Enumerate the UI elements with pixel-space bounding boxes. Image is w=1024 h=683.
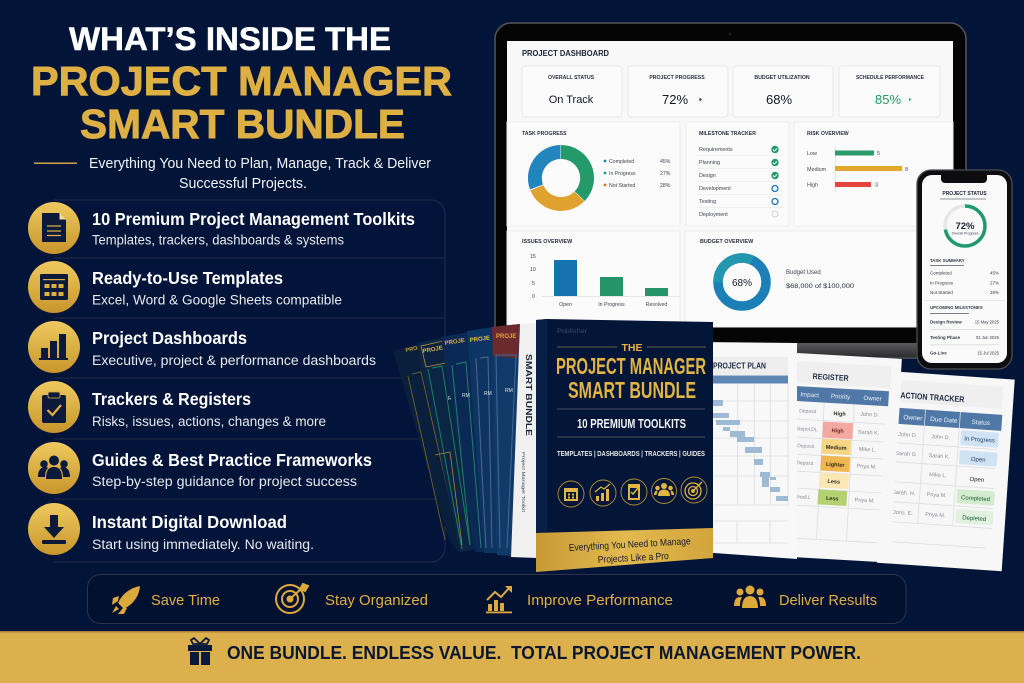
gantt chart xyxy=(713,384,788,543)
task summary: In Progress xyxy=(930,280,954,286)
sheet: register: Deposit xyxy=(797,443,815,450)
benefit: save time xyxy=(112,586,220,614)
panel: risk overview: 3 xyxy=(875,182,878,188)
book subtitle: 10 PREMIUM TOOLKITS xyxy=(577,417,686,431)
feature: download: Instant Digital Download xyxy=(92,512,287,532)
register heading: REGISTER xyxy=(812,372,849,383)
upcoming milestones: UPCOMING MILESTONES xyxy=(930,305,983,310)
panel: risk overview xyxy=(794,122,953,226)
panel: task progress xyxy=(507,122,680,226)
status pills: Open xyxy=(971,457,986,464)
feature: download xyxy=(28,503,314,555)
icon: people xyxy=(734,586,766,608)
feature: dashboards: Executive, project & performance dashboards xyxy=(92,353,376,368)
status pills: Completed xyxy=(961,495,990,503)
benefit: deliver results: Deliver Results xyxy=(779,593,877,609)
sheet: action tracker xyxy=(877,371,1015,571)
sheet: register: Priya M. xyxy=(854,498,875,505)
subtitle xyxy=(34,156,431,192)
KPI: overall status xyxy=(522,66,622,117)
title xyxy=(31,21,452,147)
panel: milestone tracker: Testing xyxy=(699,199,716,205)
icon: document xyxy=(42,213,66,242)
sheet: register: Impact xyxy=(800,391,819,399)
sheet: project plan xyxy=(700,342,797,559)
upcoming milestones xyxy=(924,300,1005,356)
panel: issues overview: 10 xyxy=(530,267,536,273)
panel: milestone tracker: Deployment xyxy=(699,212,728,218)
priority cells xyxy=(817,411,854,506)
progress ring: 72% xyxy=(955,221,975,232)
book categories: TEMPLATES | DASHBOARDS | TRACKERS | GUIDES xyxy=(557,449,705,458)
sheet: register xyxy=(785,353,902,563)
KPI: overall status: OVERALL STATUS xyxy=(548,75,595,81)
sheet: action tracker: Priya M. xyxy=(926,492,947,499)
panel: budget overview: BUDGET OVERVIEW xyxy=(700,239,754,245)
feature: toolkits: 10 Premium Project Management Toolkits xyxy=(92,209,415,229)
phone xyxy=(917,170,1012,369)
progress ring: Overall Progress xyxy=(952,232,979,236)
benefit: save time: Save Time xyxy=(151,593,220,609)
benefits bar xyxy=(88,574,906,624)
legend: 45% xyxy=(660,159,671,165)
icon: bar chart xyxy=(39,334,68,360)
panel: issues overview: 15 xyxy=(530,254,536,260)
task summary: Not Started xyxy=(930,290,953,295)
panel: milestone tracker: Development xyxy=(699,186,731,192)
sheet: register: Mike L. xyxy=(859,447,877,454)
sheet: register: Priority xyxy=(831,393,851,401)
sheet: action tracker: Owner xyxy=(903,414,923,423)
book 5: PROJE xyxy=(496,334,516,340)
feature: templates: Ready-to-Use Templates xyxy=(92,268,283,288)
sheet: register: Dredi.L xyxy=(795,494,811,501)
feature: download: Start using immediately. No waiting. xyxy=(92,537,314,552)
panel: issues overview: In Progress xyxy=(598,302,625,308)
feature: toolkits: Templates, trackers, dashboards & systems xyxy=(92,232,344,248)
panel: risk overview: 8 xyxy=(905,167,908,173)
white spine book: Project Manager Toolkit xyxy=(521,452,526,513)
KPI: schedule performance xyxy=(839,66,940,117)
title line: smart bundle: SMART BUNDLE xyxy=(80,101,405,147)
panel: milestone tracker: Planning xyxy=(699,160,720,166)
laptop xyxy=(495,23,966,358)
book 1 xyxy=(393,343,468,552)
project plan heading: PROJECT PLAN xyxy=(713,362,766,370)
sheet: action tracker: Sarah K. xyxy=(928,453,951,460)
upcoming milestones: Testing Phase xyxy=(930,335,961,340)
panel: issues overview: 5 xyxy=(532,281,535,287)
panel: issues overview: Open xyxy=(559,302,572,308)
panel: task progress: TASK PROGRESS xyxy=(522,131,567,137)
sheet: action tracker: Doris. E. xyxy=(892,510,914,517)
legend: 28% xyxy=(660,183,671,189)
status pills: Depleted xyxy=(962,515,986,523)
benefit: improve performance: Improve Performance xyxy=(527,593,673,609)
panel: budget overview: $68,000 of $100,000 xyxy=(786,283,854,290)
legend xyxy=(604,159,671,189)
fanned toolkit books xyxy=(393,323,537,558)
feature: guides: Guides & Best Practice Frameworks xyxy=(92,450,372,470)
benefit: deliver results xyxy=(734,586,877,609)
dashboard heading: PROJECT DASHBOARD xyxy=(522,49,609,58)
KPI: schedule performance: SCHEDULE PERFORMANCE xyxy=(856,75,925,81)
sheet: register: Stepol.DL xyxy=(796,426,818,433)
panel: budget overview: Budget Used xyxy=(786,270,821,276)
panel: issues overview xyxy=(507,231,680,327)
upcoming milestones: 15 May 2025 xyxy=(975,320,1000,324)
donut chart: budget xyxy=(718,258,766,306)
task summary: TASK SUMMARY xyxy=(930,258,965,263)
KPI: overall status: On Track xyxy=(549,94,594,106)
feature: trackers: Trackers & Registers xyxy=(92,389,251,409)
KPI: budget utilization xyxy=(733,66,833,117)
task summary: Completed xyxy=(930,270,952,276)
KPI: schedule performance: 85% xyxy=(875,92,901,107)
task summary xyxy=(930,258,999,295)
icon: rocket xyxy=(112,586,140,614)
icon: target xyxy=(276,584,308,613)
icon: clipboard check xyxy=(42,392,66,423)
progress ring xyxy=(945,206,985,246)
feature: dashboards: Project Dashboards xyxy=(92,328,247,348)
panel: risk overview: High xyxy=(807,182,818,188)
banner text: ONE BUNDLE. ENDLESS VALUE. TOTAL PROJECT MANAGEMENT POWER. xyxy=(227,642,861,663)
sheet: action tracker: Due Date xyxy=(930,416,958,425)
priority cells: Less xyxy=(826,496,839,503)
book 3: PROJE xyxy=(444,338,465,347)
task summary: 45% xyxy=(990,270,999,276)
donut chart: budget: 68% xyxy=(732,278,752,289)
status pills: Open xyxy=(969,477,984,484)
panel: milestone tracker: Design xyxy=(699,173,716,179)
legend: Not Started xyxy=(609,183,635,189)
icon: calendar grid xyxy=(40,274,68,300)
sheet: action tracker: Status xyxy=(971,419,991,427)
panel: risk overview: RISK OVERVIEW xyxy=(807,131,849,137)
book footer strip xyxy=(536,528,713,572)
donut chart: tasks xyxy=(528,145,594,211)
dashboard screen xyxy=(507,41,953,327)
benefit: stay organized: Stay Organized xyxy=(325,593,428,609)
sheet: action tracker: John D. xyxy=(898,432,918,439)
book title xyxy=(556,353,706,403)
upcoming milestones: Design Review xyxy=(930,320,962,324)
panel: risk overview: Low xyxy=(807,151,817,157)
book publisher text: Publisher xyxy=(557,329,587,335)
sheet: register: Owner xyxy=(863,395,882,403)
white spine book xyxy=(511,323,537,558)
upcoming milestones: 01 Jun 2025 xyxy=(976,335,1000,340)
subtitle: Everything You Need to Plan, Manage, Track & Deliver xyxy=(89,156,431,172)
KPI: project progress: 72% xyxy=(662,92,688,107)
task summary: 28% xyxy=(990,290,999,295)
bottom banner xyxy=(0,631,1024,683)
icon: gift xyxy=(188,638,212,665)
priority cells: High xyxy=(833,411,846,418)
sheet: action tracker: Sarah. H. xyxy=(892,490,916,497)
sheet: register: Priya M. xyxy=(856,464,877,471)
panel: milestone tracker xyxy=(686,122,789,226)
book 5 xyxy=(492,324,520,556)
white spine book: SMART BUNDLE xyxy=(524,354,533,437)
book 2: PROJE xyxy=(422,346,443,355)
benefit: stay organized xyxy=(276,584,428,613)
panel: risk overview: Medium xyxy=(807,167,827,173)
book title: SMART BUNDLE xyxy=(568,377,696,403)
KPI: project progress: PROJECT PROGRESS xyxy=(649,75,705,81)
book 1: PROJECT xyxy=(405,343,432,354)
feature: guides xyxy=(28,442,372,494)
book 4: PROJE xyxy=(470,336,490,344)
sheet: register: John D. xyxy=(860,412,880,419)
panel: issues overview: ISSUES OVERVIEW xyxy=(522,239,573,245)
sheet: register: Deposit xyxy=(799,408,817,415)
benefit: improve performance xyxy=(486,586,673,613)
status pills: In Progress xyxy=(964,436,995,444)
book 3: RM xyxy=(462,393,470,399)
icon: team xyxy=(38,456,70,479)
subtitle: Successful Projects. xyxy=(179,176,307,192)
book footer strip: Everything You Need to Manage xyxy=(569,536,691,554)
title line: project manager: PROJECT MANAGER xyxy=(31,58,452,104)
priority cells: Medium xyxy=(826,445,847,452)
KPI: project progress xyxy=(628,66,728,117)
icon: growth chart xyxy=(486,586,512,613)
feature: trackers: Risks, issues, actions, changes & more xyxy=(92,414,326,429)
panel: risk overview: 5 xyxy=(877,151,880,157)
panel: feature list xyxy=(28,200,445,562)
sheet: action tracker: John D. xyxy=(931,434,951,441)
panel: milestone tracker: Requirements xyxy=(699,147,733,153)
sheet: action tracker: Sarah G. xyxy=(895,451,918,458)
icon: download arrow xyxy=(42,515,66,544)
book 4: RM xyxy=(484,391,492,397)
panel: budget overview xyxy=(685,231,953,327)
task summary: 27% xyxy=(990,280,999,286)
book eyebrow: THE xyxy=(622,342,642,354)
book 2: RM xyxy=(448,396,456,402)
book 2 xyxy=(417,337,478,552)
sheet: action tracker: Mike L. xyxy=(929,472,948,479)
priority cells: Less xyxy=(827,479,840,486)
panel: milestone tracker: MILESTONE TRACKER xyxy=(699,131,756,137)
status icons xyxy=(771,146,779,217)
book title: PROJECT MANAGER xyxy=(556,353,706,379)
sheet: register: Sarah K. xyxy=(858,430,880,437)
book icons xyxy=(558,477,707,507)
panel: issues overview: 0 xyxy=(532,294,535,300)
KPI: budget utilization: BUDGET UTILIZATION xyxy=(754,75,810,81)
feature: templates xyxy=(28,261,342,313)
feature: dashboards xyxy=(28,321,376,373)
panel: issues overview: Resolved xyxy=(646,302,667,308)
sheet: register: Deposit xyxy=(796,460,814,467)
book 4 xyxy=(467,327,498,553)
legend: 27% xyxy=(660,171,671,177)
action tracker heading: ACTION TRACKER xyxy=(900,390,965,404)
KPI: budget utilization: 68% xyxy=(766,92,792,107)
sheet: action tracker: Priya M. xyxy=(925,512,946,519)
upcoming milestones: Go-Live xyxy=(930,350,947,356)
title line: what's inside: WHAT’S INSIDE THE xyxy=(69,21,391,57)
feature: toolkits xyxy=(28,202,415,254)
book 5: RM xyxy=(505,388,513,394)
book 3 xyxy=(441,332,490,552)
priority cells: Lighter xyxy=(826,462,846,469)
feature: trackers xyxy=(28,381,326,433)
book footer strip: Projects Like a Pro xyxy=(598,551,670,566)
phone heading: PROJECT STATUS xyxy=(942,191,987,197)
priority cells: High xyxy=(831,428,845,435)
legend: Completed xyxy=(609,159,634,165)
feature: templates: Excel, Word & Google Sheets compatible xyxy=(92,292,342,308)
upcoming milestones: 15 Jul 2025 xyxy=(977,350,1000,356)
status pills xyxy=(955,430,999,526)
feature: guides: Step-by-step guidance for project success xyxy=(92,474,357,489)
legend: In Progress xyxy=(609,171,636,177)
front book: smart bundle xyxy=(536,319,713,572)
